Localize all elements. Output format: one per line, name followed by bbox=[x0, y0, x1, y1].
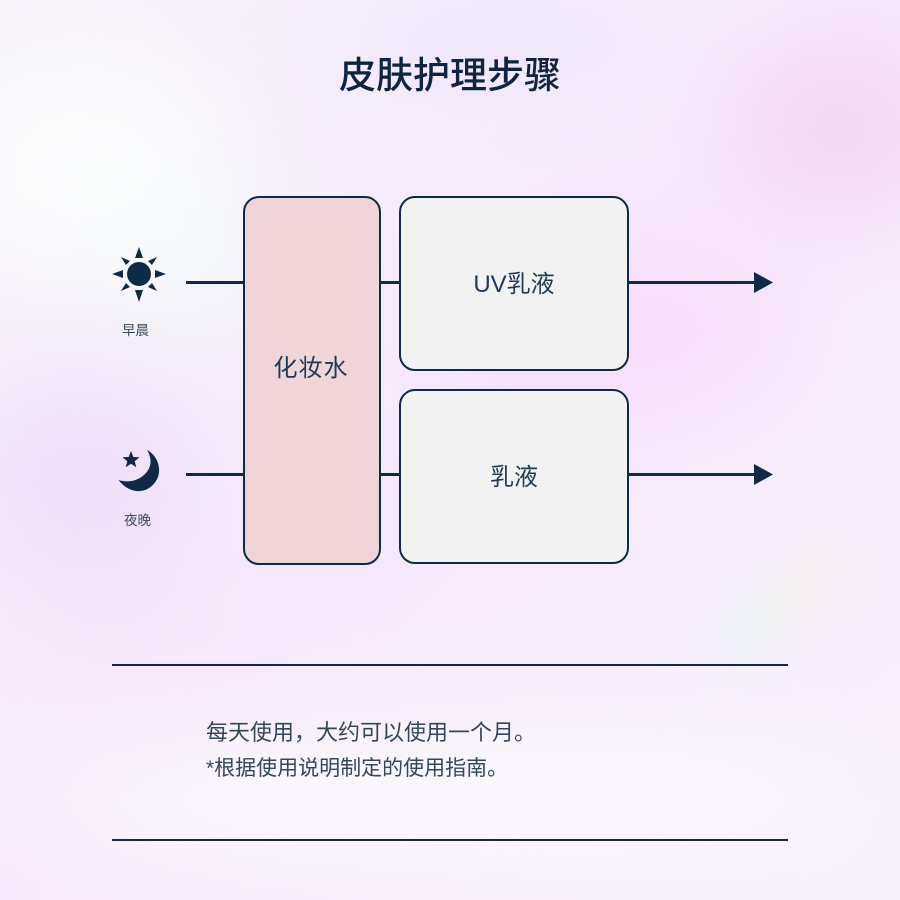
note text: *根据使用说明制定的使用指南。 bbox=[206, 757, 508, 780]
note text: 每天使用，大约可以使用一个月。 bbox=[206, 720, 536, 745]
divider top bbox=[112, 664, 788, 666]
box: toner bbox=[243, 196, 381, 565]
rainbow glow bbox=[699, 542, 845, 675]
label: morning: 早晨 bbox=[122, 323, 149, 338]
connector: morning line middle bbox=[380, 281, 401, 284]
box: UV emulsion: UV乳液 bbox=[473, 271, 555, 298]
connector: night line middle bbox=[380, 473, 401, 476]
arrow: morning bbox=[629, 272, 773, 293]
label: night: 夜晚 bbox=[124, 513, 151, 528]
connector: morning line left bbox=[186, 281, 244, 284]
box: emulsion bbox=[399, 389, 629, 564]
connector: night line left bbox=[186, 473, 244, 476]
box: emulsion: 乳液 bbox=[490, 464, 538, 491]
title: 皮肤护理步骤 bbox=[339, 55, 561, 96]
box: toner: 化妆水 bbox=[274, 355, 348, 382]
icon: sun bbox=[112, 247, 166, 302]
note text bbox=[206, 720, 536, 780]
arrow: night bbox=[629, 464, 773, 485]
icon: moon and star bbox=[118, 450, 160, 492]
box: UV emulsion bbox=[399, 196, 629, 371]
divider bottom bbox=[112, 839, 788, 841]
